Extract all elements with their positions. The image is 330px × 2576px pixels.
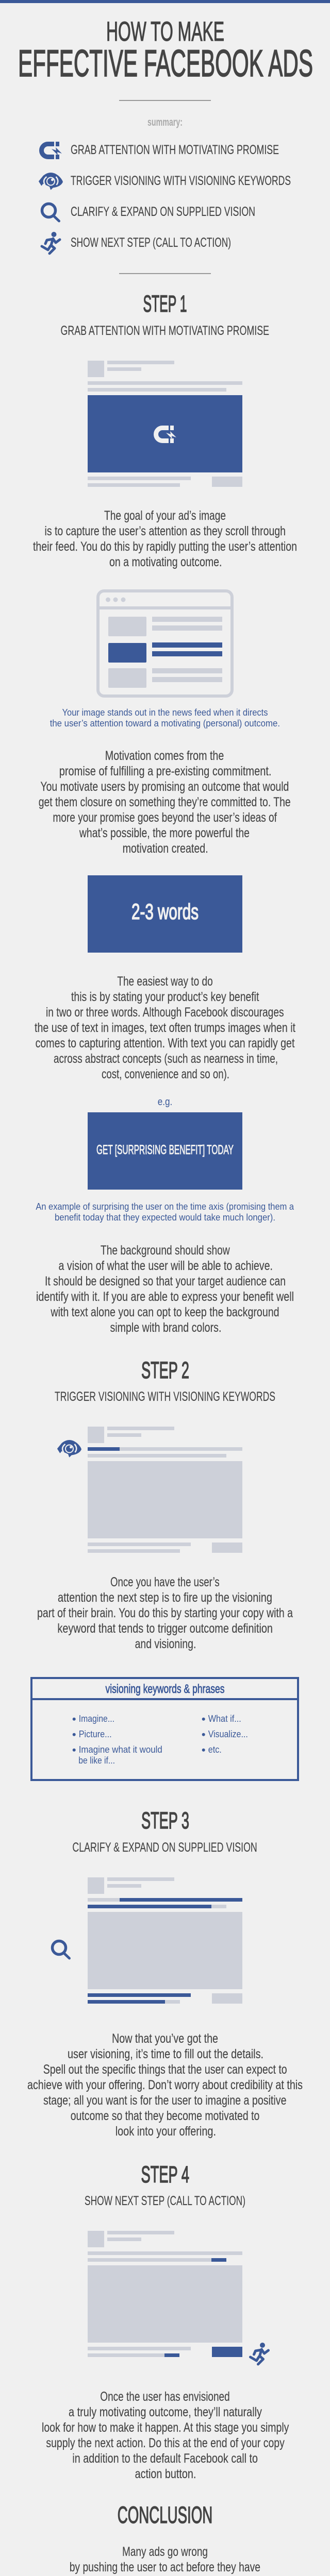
keyword list: left column: Imagine what it would — [79, 1744, 162, 1755]
text block: details: outcome so that they become motivated to — [71, 2109, 259, 2123]
text block: details: look into your offering. — [116, 2124, 216, 2139]
ad mockup: image highlighted — [88, 361, 242, 487]
caption: example: benefit today that they expected would take much longer). — [55, 1212, 275, 1223]
icon: magnifying glass — [42, 204, 59, 221]
keyword list: right column: What if... — [208, 1714, 241, 1724]
e.g. label: e.g. — [158, 1096, 172, 1108]
keyword list: left column — [73, 1714, 162, 1766]
text block: conclusion: by pushing the user to act before they have — [70, 2560, 260, 2574]
icon: runner — [42, 232, 60, 253]
text block: easiest way: The easiest way to do — [117, 974, 213, 989]
text block: visioning: and visioning. — [135, 1637, 196, 1651]
text block: visioning: attention the next step is to fire up the visioning — [58, 1590, 272, 1605]
panel heading: visioning keywords & phrases — [105, 1682, 225, 1696]
text block: motivation — [39, 749, 291, 856]
text block: next action: a truly motivating outcome, they’ll naturally — [69, 2405, 262, 2419]
text block: details — [27, 2031, 303, 2139]
keyword list: left column: be like if... — [78, 1755, 115, 1766]
text block: background: The background should show — [101, 1243, 230, 1258]
caption: news feed — [50, 707, 280, 728]
blue box: example headline — [88, 1112, 242, 1190]
text block: motivation: motivation created. — [123, 841, 208, 856]
heading: step 3: STEP 3 — [141, 1807, 189, 1834]
heading: step 4 — [85, 2161, 245, 2208]
icon: eye — [39, 173, 63, 190]
text block: easiest way: this is by stating your product’s key benefit — [71, 990, 259, 1004]
summary list — [39, 142, 291, 253]
summary label: summary: — [147, 116, 183, 128]
text block: background — [36, 1243, 294, 1335]
text block: motivation: Motivation comes from the — [105, 749, 224, 763]
heading: step 3 — [72, 1807, 257, 1855]
text block: conclusion: Many ads go wrong — [122, 2545, 208, 2559]
text block: motivation: what’s possible, the more powerful the — [79, 826, 250, 840]
text block: motivation: promise of fulfilling a pre-existing commitment. — [59, 764, 271, 778]
keyword list: left column: Imagine... — [79, 1714, 114, 1724]
blue box: 2-3 words — [88, 875, 242, 953]
text block: next action — [42, 2389, 289, 2481]
text block: easiest way: cost, convenience and so on). — [102, 1067, 229, 1081]
text block: next action: Once the user has envisioned — [100, 2389, 230, 2404]
summary item 3: CLARIFY & EXPAND ON SUPPLIED VISION — [71, 205, 255, 219]
ad mockup: call to action highlighted — [88, 2231, 268, 2364]
text block: goal of the image: on a motivating outcome. — [109, 555, 222, 569]
text block: easiest way — [35, 974, 295, 1081]
icon: runner — [251, 2343, 268, 2364]
text block: details: user visioning, it’s time to fill out the details. — [68, 2047, 263, 2061]
heading: step 1: STEP 1 — [143, 291, 187, 317]
summary item 4: SHOW NEXT STEP (CALL TO ACTION) — [71, 235, 231, 250]
panel: visioning keywords and phrases — [30, 1678, 299, 1780]
text block: visioning — [37, 1575, 293, 1651]
blue box: 2-3 words: 2-3 words — [131, 900, 199, 924]
text block: details: Now that you’ve got the — [112, 2031, 218, 2046]
text block: conclusion — [34, 2545, 297, 2576]
icon: eye — [58, 1440, 81, 1457]
icon: magnet — [42, 142, 62, 159]
caption: news feed: Your image stands out in the news feed when it directs — [62, 707, 268, 718]
icon: white magnet — [156, 426, 176, 443]
caption: example — [36, 1201, 294, 1223]
keyword list: right column — [202, 1714, 248, 1755]
text block: background: a vision of what the user will be able to achieve. — [59, 1259, 273, 1273]
text block: background: simple with brand colors. — [110, 1320, 221, 1335]
heading: step 3: CLARIFY & EXPAND ON SUPPLIED VISION — [72, 1840, 257, 1855]
keyword list: right column: etc. — [208, 1744, 222, 1755]
text block: visioning: Once you have the user’s — [110, 1575, 220, 1589]
heading: step 4: STEP 4 — [141, 2161, 189, 2188]
keyword list: left column: Picture... — [79, 1729, 112, 1739]
title: HOW TO MAKE — [106, 16, 224, 47]
heading: step 4: SHOW NEXT STEP (CALL TO ACTION) — [85, 2194, 245, 2208]
caption: example: An example of surprising the user on the time axis (promising them a — [36, 1201, 294, 1212]
heading: step 2: STEP 2 — [141, 1357, 189, 1383]
text block: goal of the image: The goal of your ad’s image — [104, 509, 226, 523]
ad mockup: copy highlighted — [53, 1877, 242, 2004]
blue box: example headline: GET [SURPRISING BENEFIT] TODAY — [96, 1143, 234, 1157]
heading: step 1 — [61, 291, 269, 338]
text block: visioning: keyword that tends to trigger outcome definition — [57, 1621, 273, 1636]
text block: next action: action button. — [135, 2467, 196, 2481]
heading: conclusion: CONCLUSION — [118, 2502, 212, 2528]
keyword list: right column: Visualize... — [208, 1729, 248, 1739]
text block: next action: in addition to the default Facebook call to — [72, 2451, 258, 2466]
icon: magnifying glass — [53, 1941, 69, 1958]
caption: news feed: the user’s attention toward a motivating (personal) outcome. — [50, 718, 280, 728]
heading: step 2 — [55, 1357, 275, 1404]
text block: goal of the image — [33, 509, 297, 569]
ad mockup: first words highlighted — [58, 1427, 242, 1553]
browser news feed illustration — [98, 591, 232, 696]
title — [18, 16, 313, 84]
